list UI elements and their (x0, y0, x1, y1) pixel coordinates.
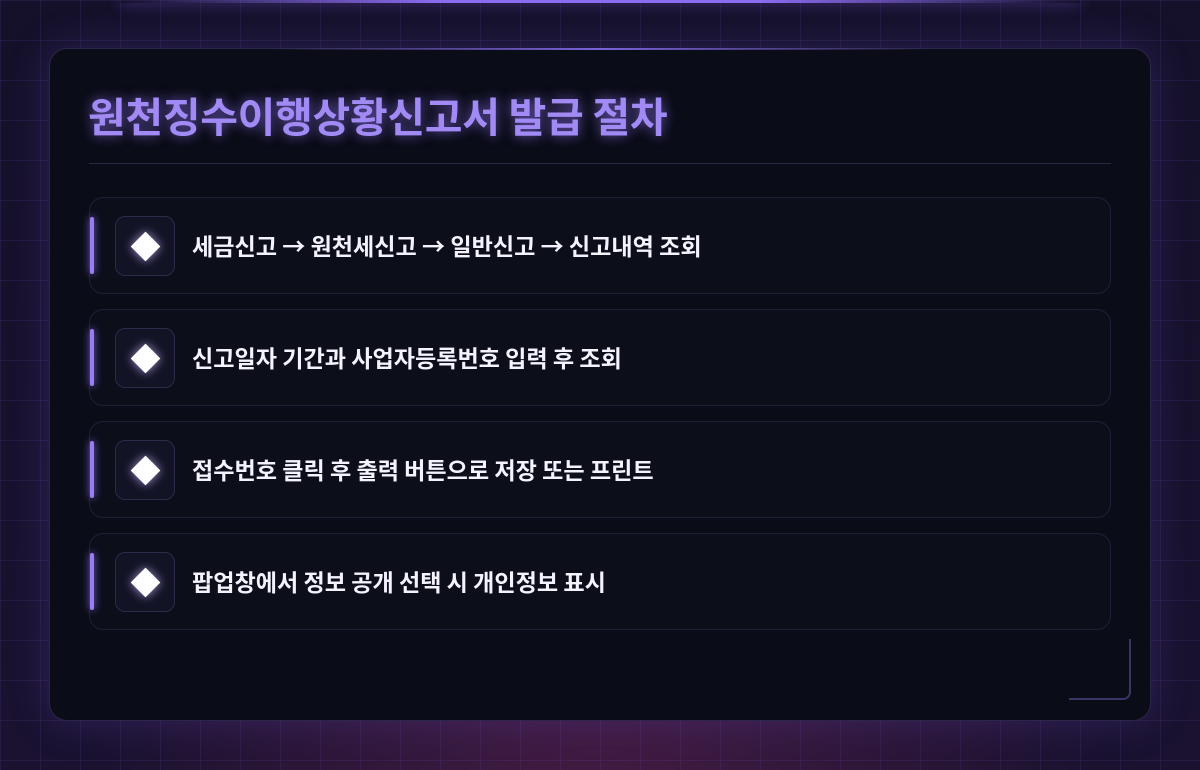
icon: diamond (115, 552, 175, 612)
step 3 (89, 421, 1111, 518)
icon: diamond (115, 216, 175, 276)
step 1 (89, 197, 1111, 294)
step text: 신고일자 기간과 사업자등록번호 입력 후 조회 (192, 340, 622, 374)
step 4 (89, 533, 1111, 630)
icon: diamond (115, 328, 175, 388)
step text: 팝업창에서 정보 공개 선택 시 개인정보 표시 (192, 564, 606, 598)
step 2 (89, 309, 1111, 406)
step text: 세금신고 → 원천세신고 → 일반신고 → 신고내역 조회 (192, 228, 702, 262)
title: 원천징수이행상황신고서 발급 절차 (88, 84, 667, 144)
step text: 접수번호 클릭 후 출력 버튼으로 저장 또는 프린트 (192, 452, 654, 486)
icon: diamond (115, 440, 175, 500)
corner decoration (1069, 639, 1131, 700)
